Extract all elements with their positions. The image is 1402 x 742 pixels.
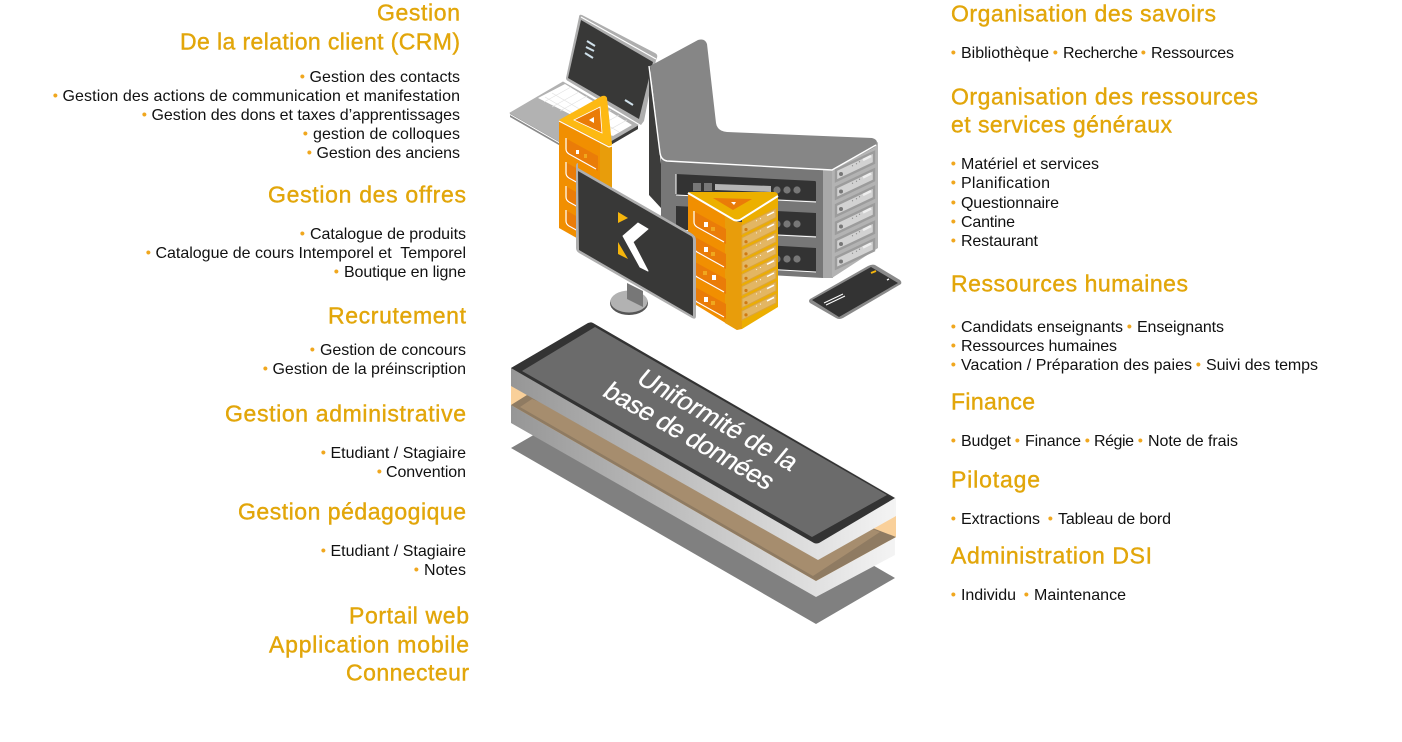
list: CRM items: Gestion des dons et taxes d’apprentissages — [152, 107, 460, 124]
heading: ressources humaines: Ressources humaines — [951, 270, 1188, 296]
list: pédagogique items: Notes — [424, 562, 466, 579]
list: CRM items: • — [303, 125, 308, 142]
list: finance items: • — [1085, 432, 1090, 449]
icon: grey server rack — [649, 40, 878, 278]
list: services items: • — [951, 174, 956, 191]
heading: CRM: Gestion — [377, 0, 460, 25]
heading: finance: Finance — [951, 388, 1035, 414]
list: CRM items: Gestion des anciens — [316, 145, 460, 162]
list: services items: • — [951, 194, 956, 211]
list: savoirs items: Recherche — [1063, 45, 1138, 62]
list: offres items: • — [300, 225, 305, 242]
icon: laptop — [510, 15, 657, 160]
heading: savoirs: Organisation des savoirs — [951, 0, 1216, 26]
heading: portail, mobile, connecteur: Application mobile — [269, 631, 469, 657]
heading: gestion administrative: Gestion administrative — [225, 400, 466, 426]
list: finance items: • — [1138, 432, 1143, 449]
list: CRM items: • — [53, 87, 58, 104]
list: pédagogique items: • — [321, 542, 326, 559]
list: RH items: • — [1127, 318, 1132, 335]
list: administrative items: • — [377, 463, 382, 480]
icon: database layers — [511, 322, 896, 624]
heading: CRM — [180, 0, 460, 54]
list: recrutement items: Gestion de la préinscription — [272, 361, 466, 378]
label: base de données — [597, 377, 782, 495]
list: offres items: Catalogue de cours Intemporel et Temporel — [156, 245, 466, 262]
list: CRM items: • — [142, 106, 147, 123]
icon: orange server right — [688, 192, 778, 330]
list: administrative items: Convention — [386, 464, 466, 481]
list: DSI items — [951, 586, 1126, 604]
list: services items: • — [951, 213, 956, 230]
list: finance items: Finance — [1025, 433, 1081, 450]
upper layer — [511, 322, 896, 560]
heading: administration DSI: Administration DSI — [951, 542, 1152, 568]
panel: left column of modules — [53, 0, 469, 685]
list: DSI items: Maintenance — [1034, 587, 1126, 604]
list: offres items: • — [146, 244, 151, 261]
list: services items: • — [951, 232, 956, 249]
label: Uniformité de la — [631, 364, 806, 476]
middle layer — [511, 340, 896, 581]
list: savoirs items: • — [1141, 44, 1146, 61]
heading: portail, mobile, connecteur: Portail web — [349, 602, 469, 628]
heading: ressources et services: Organisation des ressources — [951, 83, 1258, 109]
list: RH items: • — [951, 318, 956, 335]
list: CRM items: Gestion des contacts — [310, 69, 460, 86]
heading: ressources et services: et services généraux — [951, 111, 1172, 137]
list: recrutement items: • — [263, 360, 268, 377]
list: offres items — [146, 225, 466, 281]
list: savoirs items — [951, 44, 1234, 62]
list: finance items: Budget — [961, 433, 1012, 450]
heading: ressources et services — [951, 83, 1258, 137]
list: recrutement items: Gestion de concours — [320, 342, 466, 359]
list: RH items: • — [951, 356, 956, 373]
list: DSI items: • — [951, 586, 956, 603]
list: CRM items — [53, 68, 460, 162]
list: RH items: Candidats enseignants — [961, 319, 1123, 336]
list: administrative items: Etudiant / Stagiaire — [330, 445, 466, 462]
list: pédagogique items: Etudiant / Stagiaire — [330, 543, 466, 560]
heading: portail, mobile, connecteur — [269, 602, 469, 685]
list: services items: Matériel et services — [961, 156, 1099, 173]
heading: gestion pédagogique: Gestion pédagogique — [238, 498, 466, 524]
list: finance items: • — [951, 432, 956, 449]
list: RH items — [951, 318, 1318, 374]
list: savoirs items: Bibliothèque — [961, 45, 1049, 62]
heading: portail, mobile, connecteur: Connecteur — [346, 659, 469, 685]
heading: offres: Gestion des offres — [268, 181, 466, 207]
list: finance items — [951, 432, 1238, 450]
list: pédagogique items — [321, 542, 466, 579]
list: RH items: Ressources humaines — [961, 338, 1117, 355]
list: savoirs items: • — [1053, 44, 1058, 61]
list: offres items: Boutique en ligne — [344, 264, 466, 281]
list: offres items: Catalogue de produits — [310, 226, 466, 243]
list: finance items: Note de frais — [1148, 433, 1238, 450]
list: DSI items: Individu — [961, 587, 1016, 604]
list: pilotage items: Tableau de bord — [1058, 511, 1171, 528]
list: pilotage items: • — [1048, 510, 1053, 527]
list: finance items: • — [1015, 432, 1020, 449]
list: RH items: • — [951, 337, 956, 354]
list: administrative items — [321, 444, 466, 481]
list: recrutement items: • — [310, 341, 315, 358]
list: CRM items: • — [307, 144, 312, 161]
panel: right column of modules — [951, 0, 1318, 604]
list: CRM items: gestion de colloques — [313, 126, 460, 143]
heading: recrutement: Recrutement — [328, 302, 467, 328]
shadow — [511, 402, 895, 624]
list: finance items: Régie — [1094, 433, 1134, 450]
list: pilotage items: Extractions — [961, 511, 1040, 528]
list: services items: Cantine — [961, 214, 1015, 231]
list: CRM items: Gestion des actions de communication et manifestation — [62, 88, 460, 105]
list: pilotage items — [951, 510, 1171, 528]
heading: CRM: De la relation client (CRM) — [180, 28, 460, 54]
list: services items: • — [951, 155, 956, 172]
list: RH items: • — [1196, 356, 1201, 373]
list: savoirs items: Ressources — [1151, 45, 1234, 62]
list: DSI items: • — [1024, 586, 1029, 603]
list: CRM items: • — [300, 68, 305, 85]
list: offres items: • — [334, 263, 339, 280]
list: administrative items: • — [321, 444, 326, 461]
list: RH items: Vacation / Préparation des paies — [961, 357, 1192, 374]
heading: pilotage: Pilotage — [951, 466, 1040, 492]
icon: desktop monitor with logo — [576, 163, 696, 319]
list: services items: Questionnaire — [961, 195, 1059, 212]
list: RH items: Enseignants — [1137, 319, 1224, 336]
list: RH items: Suivi des temps — [1206, 357, 1318, 374]
list: services items — [951, 155, 1099, 250]
list: services items: Restaurant — [961, 233, 1039, 250]
list: recrutement items — [263, 341, 466, 378]
list: pédagogique items: • — [414, 561, 419, 578]
list: savoirs items: • — [951, 44, 956, 61]
lower layer — [511, 359, 895, 597]
icon: orange server left — [559, 96, 612, 258]
icon: smartphone — [809, 265, 901, 319]
list: services items: Planification — [961, 175, 1050, 192]
list: pilotage items: • — [951, 510, 956, 527]
